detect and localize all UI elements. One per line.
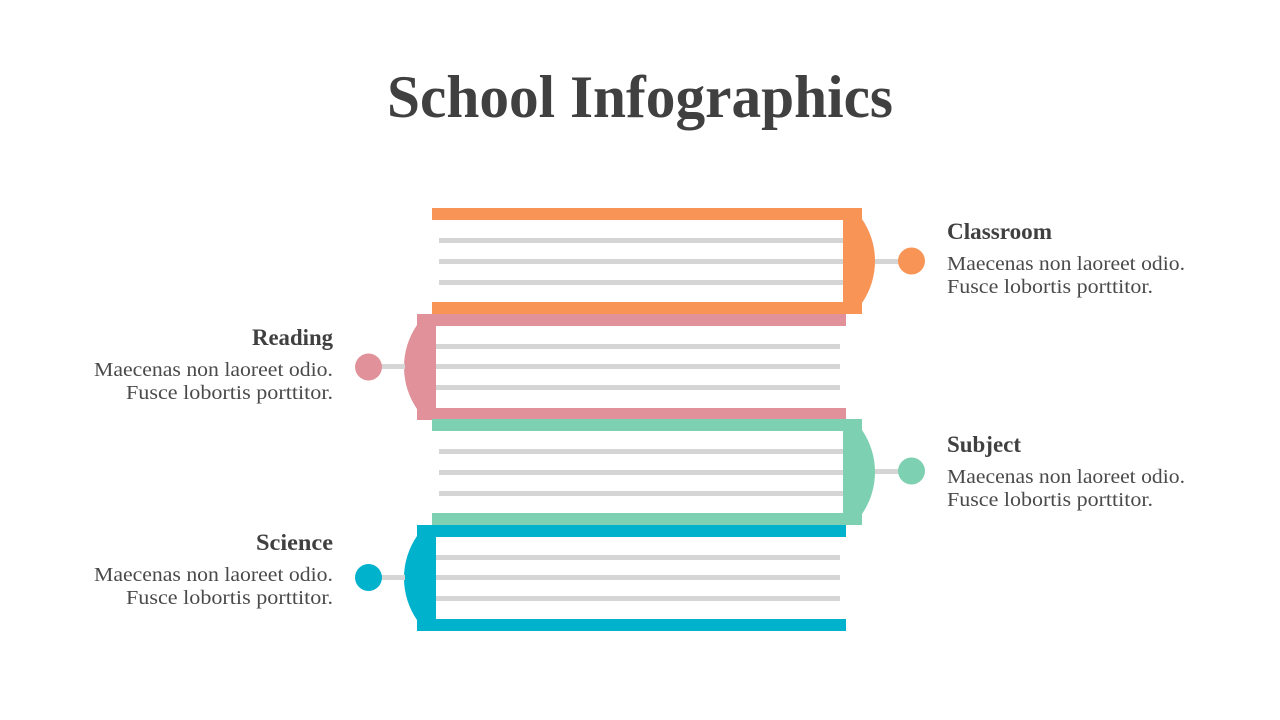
title: School Infographics bbox=[387, 64, 893, 130]
connector: reading bbox=[380, 364, 405, 369]
marker: green dot bbox=[898, 458, 925, 484]
marker: blue dot bbox=[355, 564, 382, 591]
heading: classroom: Classroom bbox=[947, 219, 1052, 244]
label: reading bbox=[94, 325, 333, 404]
connector: science bbox=[380, 575, 405, 580]
body: subject: Fusce lobortis porttitor. bbox=[947, 489, 1153, 511]
cover: orange bbox=[432, 208, 875, 314]
body: classroom: Maecenas non laoreet odio. bbox=[947, 253, 1185, 275]
cover: pink bbox=[404, 314, 846, 420]
marker: pink dot bbox=[355, 354, 382, 380]
label: classroom bbox=[947, 219, 1185, 298]
book: subject bbox=[432, 419, 925, 525]
body: classroom: Fusce lobortis porttitor. bbox=[947, 276, 1153, 298]
body: science: Maecenas non laoreet odio. bbox=[94, 564, 333, 586]
body: reading bbox=[94, 359, 333, 404]
body: reading: Maecenas non laoreet odio. bbox=[94, 359, 333, 381]
page lines: classroom bbox=[439, 238, 843, 285]
book: science bbox=[355, 525, 846, 631]
body: science bbox=[94, 564, 333, 609]
connector: classroom bbox=[875, 259, 901, 264]
book: reading bbox=[355, 314, 846, 420]
body: classroom bbox=[947, 253, 1185, 298]
connector: subject bbox=[875, 469, 901, 474]
heading: reading: Reading bbox=[252, 325, 333, 350]
body: subject bbox=[947, 466, 1185, 511]
page lines: reading bbox=[436, 344, 840, 390]
page lines: subject bbox=[439, 449, 843, 496]
body: science: Fusce lobortis porttitor. bbox=[126, 587, 333, 609]
label: subject bbox=[947, 432, 1185, 511]
marker: orange dot bbox=[898, 248, 925, 274]
body: subject: Maecenas non laoreet odio. bbox=[947, 466, 1185, 488]
heading: subject: Subject bbox=[947, 432, 1021, 457]
cover: blue bbox=[404, 525, 846, 631]
body: reading: Fusce lobortis porttitor. bbox=[126, 382, 333, 404]
label: science bbox=[94, 530, 333, 609]
page lines: science bbox=[436, 555, 840, 601]
book: classroom bbox=[432, 208, 925, 314]
cover: green bbox=[432, 419, 875, 525]
heading: science: Science bbox=[256, 530, 333, 555]
